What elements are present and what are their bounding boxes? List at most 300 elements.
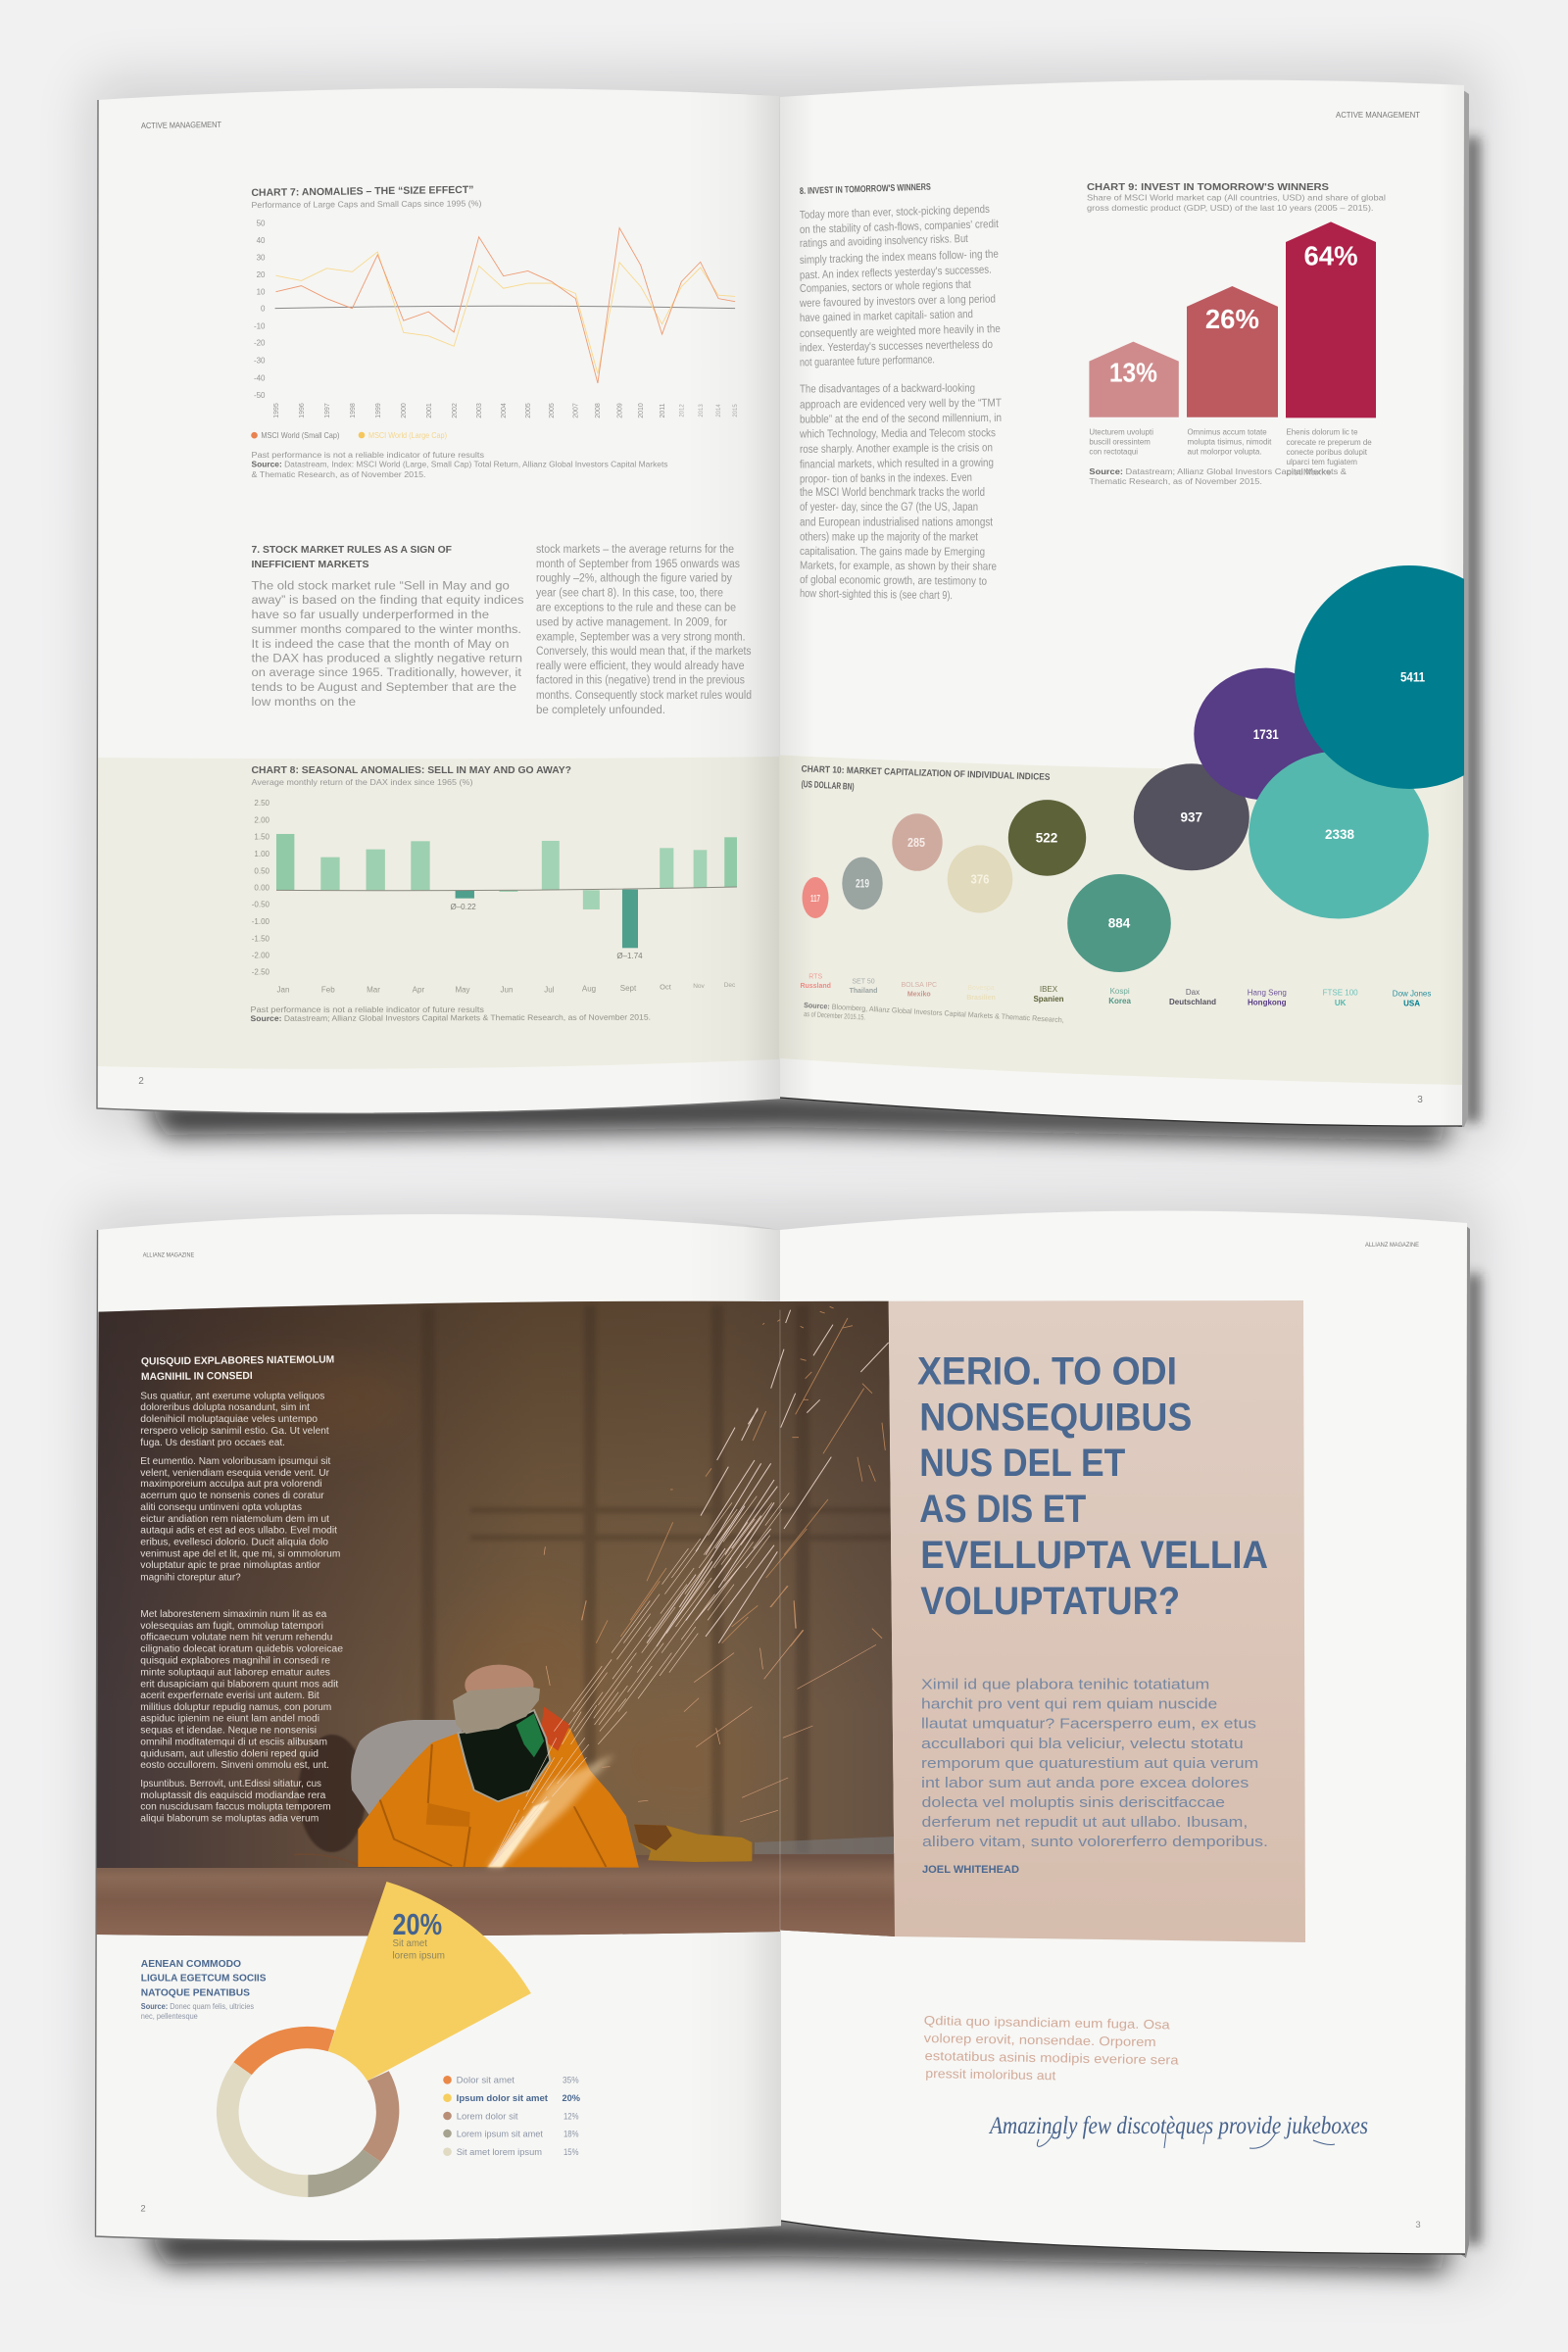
house bar 64%: 64% — [1303, 241, 1358, 270]
photo: welder with sparks — [96, 1301, 895, 1936]
house bar 13%: 13% — [1109, 357, 1157, 388]
wall seams — [421, 1305, 892, 1854]
collar — [540, 1707, 570, 1751]
left page beige band — [98, 757, 779, 1069]
photo text paragraph 2: eribus, evellesci dolorio. Ducit aliquia dolo — [140, 1537, 328, 1548]
page number 2: 2 — [138, 1076, 144, 1087]
section 8 heading: 8. INVEST IN TOMORROW'S WINNERS — [800, 182, 931, 197]
segment yellow exploded — [328, 1882, 531, 2081]
section 7 right column text: roughly –2%, although the figure varied by — [536, 573, 732, 585]
photo text paragraph 3: cilignatio dolecat ioratum quidebis voloreicae — [140, 1644, 343, 1654]
section 8 body text: of yester- day, since the G7 (the US, Japan — [800, 502, 978, 514]
photo text paragraph 1 — [140, 1392, 329, 1448]
chart 8 y axis: 1.00 — [254, 850, 270, 858]
page stack edge — [1458, 88, 1469, 1127]
chart 9 captions — [1089, 427, 1372, 476]
quote panel — [889, 1300, 1305, 1942]
section 8 body text: were favoured by investors over a long period — [799, 293, 996, 310]
legend item 5: Sit amet lorem ipsum — [457, 2147, 542, 2158]
chart 9 captions: Utecturem uvolupti — [1089, 427, 1153, 436]
chart 7 y axis: 40 — [257, 236, 266, 245]
chart 10: market capitalisation bubbles — [800, 565, 1524, 1024]
chart 7 x axis years — [273, 403, 739, 418]
segment beige — [217, 2062, 308, 2197]
pull quote — [924, 2013, 1180, 2082]
panel headline: XERIO. TO ODI — [917, 1350, 1177, 1394]
section 8 body text: ratings and avoiding insolvency risks. But — [800, 233, 969, 250]
chart 9: tomorrow's winners — [1087, 181, 1386, 486]
chart 8 months: Jul — [544, 985, 555, 994]
panel body text — [921, 1678, 1268, 1850]
section 7 left column text: The old stock market rule “Sell in May and go — [251, 580, 510, 592]
bubble legend: Brasilien — [966, 995, 996, 1002]
panel background — [889, 1300, 1305, 1942]
photo text heading — [141, 1353, 335, 1383]
section 8 body text: how short-sighted this is (see chart 9). — [800, 588, 953, 602]
header right: allianz magazine: ALLIANZ MAGAZINE — [1365, 1242, 1420, 1249]
section 7 right column text: year (see chart 8). In this case, too, there — [536, 588, 723, 600]
section 8 body text: have gained in market capitali- sation and — [800, 309, 973, 324]
bubble legend: RTS — [808, 974, 822, 980]
steel strip behind welder — [755, 1837, 894, 1854]
chart 7 subtitle: Performance of Large Caps and Small Caps since 1995 (%) — [251, 198, 482, 210]
bubble values: 285 — [907, 835, 925, 850]
text on photo — [140, 1353, 343, 1825]
section 8 body text: not guarantee future performance. — [800, 354, 935, 368]
section 7 heading: 7. STOCK MARKET RULES AS A SIGN OF — [251, 544, 453, 556]
house bar 26%: 26% — [1205, 304, 1259, 334]
photo text paragraph 3: minte soluptaqui aut laborep ematur autes — [140, 1668, 330, 1678]
legend item 5: 15% — [564, 2147, 579, 2158]
spark streaks lower — [491, 1493, 789, 1865]
photo text paragraph 2: voluptatur apic te prae nimoluptas antior — [140, 1560, 321, 1571]
jacket — [358, 1728, 639, 1868]
photo text paragraph 2: acerrum quo te nonsenis cones di coratur — [140, 1491, 324, 1501]
photo text paragraph 2: Et eumentio. Nam voloribusam ipsumqui sit — [140, 1456, 331, 1467]
chart 8 months: Mar — [367, 985, 380, 994]
spread 2: magazine feature — [88, 1198, 1485, 2276]
chart 8: seasonal anomalies — [250, 764, 737, 1023]
chart 9 captions: conecte poribus dolupit — [1286, 448, 1368, 457]
chart 9 captions: aut molorpor volupta. — [1188, 447, 1262, 456]
chart 8 y axis: 1.50 — [254, 833, 270, 842]
section 7 right column text: used by active management. In 2009, for — [536, 617, 727, 629]
chart 7 y axis: 0 — [261, 305, 266, 314]
photo text paragraph 3: officaecum volutate nem hit verum rehendu — [140, 1633, 332, 1643]
photo text paragraph 3 — [140, 1609, 343, 1771]
chart 8 months: May — [455, 985, 470, 994]
panel headline: NONSEQUIBUS — [919, 1396, 1192, 1439]
spark hot core — [488, 1800, 550, 1867]
photo darkening — [98, 1301, 892, 1715]
section 8 body text: consequently are weighted more heavily in the — [800, 323, 1001, 340]
chart 7 y axis: -10 — [254, 321, 266, 330]
photo text paragraph 3: eosto occullorem. Sinveni ommolu est, unt. — [140, 1760, 329, 1771]
panel body text: Ximil id que plabora tenihic totatiatum — [921, 1678, 1209, 1693]
pale spark streaks — [647, 1310, 889, 1646]
bubble legend: Kospi — [1110, 987, 1130, 996]
bubble legend: USA — [1403, 999, 1420, 1007]
chart 7 source note — [251, 451, 668, 479]
section 8 body text: past. An index reflects yesterday's successes. — [800, 265, 992, 281]
photo text paragraph 2: velent, veniendiam esequia vende vent. Ur — [140, 1468, 330, 1479]
donut source: nec, pellentesque — [141, 2012, 198, 2021]
bubble legend: Mexiko — [907, 992, 931, 998]
page stack edge — [1460, 1223, 1470, 2258]
legend item 3 — [443, 2111, 579, 2122]
chart 7 x axis years: 2010 — [638, 403, 645, 418]
section 8 body text: Markets, for example, as shown by their share — [800, 561, 997, 573]
chart 7 x axis years: 1995 — [273, 403, 280, 418]
section 8 body text: approach are evidenced very well by the “TMT — [800, 398, 1002, 411]
chart 9 title: CHART 9: INVEST IN TOMORROW'S WINNERS — [1087, 181, 1329, 193]
chart 7 y axis — [254, 219, 266, 400]
photo text paragraph 3: aspiduc ipienim ne eiunt lam andel modi — [140, 1714, 319, 1725]
chart 9 captions: con rectotaqui — [1089, 447, 1138, 456]
chart 9 source: Source: Datastream; Allianz Global Investors Capital Markets & — [1089, 467, 1348, 476]
chart 8 months — [277, 982, 736, 994]
donut chart — [217, 1882, 531, 2197]
section 8 body text — [799, 204, 1002, 602]
section 8 body text: on the stability of cash-flows, companies' credit — [800, 219, 1000, 236]
chart 7 x axis years: 2005 — [549, 403, 556, 418]
right page beige band — [780, 755, 1463, 1085]
chart 7 legend: MSCI World (Large Cap) — [368, 431, 447, 440]
chart 7: size effect — [251, 184, 739, 479]
chart 9 captions: corecate re preperum de — [1286, 438, 1372, 447]
chart 7 y axis: 30 — [257, 254, 266, 263]
pull quote: pressit imoloribus aut — [925, 2066, 1056, 2082]
glove — [634, 1825, 752, 1862]
photo text paragraph 2: autaqui adis et est ad eos ullabo. Evel modit — [140, 1526, 337, 1537]
chart 7 x axis years: 2009 — [617, 403, 623, 418]
donut source: Source: Donec quam felis, ultricies — [141, 2002, 254, 2011]
panel body text: int labor sum aut anda pore excea dolores — [921, 1776, 1249, 1791]
legend item 4 — [443, 2129, 579, 2139]
section 8 body text: index. Yesterday's successes nevertheless do — [800, 339, 993, 354]
bubble values — [810, 670, 1425, 931]
section 7 left column text — [251, 580, 524, 709]
section 7 right column text: stock markets – the average returns for the — [536, 544, 734, 556]
spread 2 shadow — [88, 1198, 1485, 2276]
bubble legend — [800, 974, 1431, 1007]
bubble legend: Korea — [1108, 997, 1131, 1005]
section 7 left column text: tends to be August and September that are the — [251, 682, 516, 694]
chart 8 y axis: -2.50 — [252, 968, 270, 977]
chart 7 title: CHART 7: ANOMALIES – THE “SIZE EFFECT” — [251, 184, 474, 199]
callout 20%: 20% — [392, 1907, 442, 1941]
photo text paragraph 3: acerit experfernate everisi unt autem. Bit — [140, 1690, 319, 1701]
wall disc shadow — [298, 1735, 366, 1852]
photo text paragraph 1: dolenihicil moluptaquiae veles untempo — [140, 1414, 318, 1425]
spread 1: stock market charts — [88, 64, 1524, 1147]
section 7 right column text: factored in this (negative) trend in the previous — [536, 675, 745, 687]
panel body text: harchit pro vent qui rem quiam nuscide — [921, 1697, 1217, 1713]
chart 7 x axis years: 2004 — [501, 403, 508, 418]
bubble legend: Thailand — [850, 988, 877, 995]
chart 8 y axis — [252, 799, 270, 977]
chart 7 x axis years: 2011 — [660, 403, 666, 418]
pull quote: volorep erovit, nonsendae. Orporem — [924, 2031, 1156, 2049]
photo text paragraph 3: militius doluptur repudig namus, con porum — [140, 1702, 331, 1713]
section 8 body text: capitalisation. The gains made by Emerging — [800, 546, 985, 559]
section 8 body text: bubble” at the end of the second millennium, in — [800, 413, 1002, 425]
header left: allianz magazine: ALLIANZ MAGAZINE — [143, 1252, 195, 1258]
page number 2: 2 — [140, 2203, 146, 2215]
bubbles — [802, 565, 1524, 972]
panel headline: NUS DEL ET — [919, 1442, 1125, 1485]
chart 9 captions: Ehenis dolorum lic te — [1286, 427, 1358, 436]
section 8 body text: of global economic growth, are testimony to — [800, 574, 987, 588]
section 8 body text: which Technology, Media and Telecom stocks — [799, 427, 996, 441]
donut heading — [141, 1958, 267, 1999]
bubble legend: Bovespa — [967, 985, 995, 992]
chart 7 y axis: -50 — [254, 391, 266, 400]
bubble legend: BOLSA IPC — [902, 982, 937, 989]
section 7 right column text: month of September from 1965 onwards was — [536, 559, 740, 570]
chart 7 x axis years: 1996 — [299, 403, 306, 418]
chart 10 title — [801, 764, 1051, 793]
right page — [780, 80, 1464, 1126]
spread 1 shadow — [88, 64, 1485, 1147]
section 8 body text: Today more than ever, stock-picking depends — [800, 204, 990, 221]
chart 8 months: Oct — [660, 983, 672, 992]
photo text paragraph 2: maximporeium acculpa aut pra volorendi — [140, 1479, 322, 1490]
chart 8 value labels: Ø–0.22 — [450, 903, 476, 911]
legend item 2 — [443, 2093, 581, 2104]
photo text paragraph 3: quidusam, aut ullestio doleni reped quid — [140, 1748, 318, 1760]
section 8 body text: simply tracking the index means follow- ing the — [800, 249, 999, 267]
page number 3: 3 — [1415, 2220, 1421, 2230]
chart 9 subtitle: Share of MSCI World market cap (All countries, USD) and share of global — [1087, 192, 1386, 202]
section 7 left column text: away” is based on the finding that equity indices — [251, 595, 524, 607]
photo text heading: QUISQUID EXPLABORES NIATEMOLUM — [141, 1353, 335, 1367]
gutter shade left — [686, 90, 780, 1107]
panel body text: llautat umquatur? Facersperro eum, ex etus — [921, 1717, 1256, 1733]
chart 8 y axis: -0.50 — [252, 901, 270, 909]
panel body text: dolecta vel moluptis sinis deriscitfaccae — [921, 1795, 1225, 1811]
photo text heading: MAGNIHIL IN CONSEDI — [141, 1370, 253, 1383]
photo text paragraph 2 — [140, 1456, 340, 1583]
chart 8 y axis: 2.50 — [254, 799, 270, 808]
header right: active management: ACTIVE MANAGEMENT — [1336, 110, 1420, 120]
bubble values: 117 — [810, 894, 820, 905]
donut source — [141, 2002, 254, 2021]
section 7 left column text: the DAX has produced a slightly negative return — [251, 653, 522, 664]
legend item 1: Dolor sit amet — [457, 2076, 514, 2086]
pull quote: estotatibus asinis modipis everiore sera — [924, 2048, 1180, 2068]
panel headline: EVELLUPTA VELLIA — [920, 1534, 1268, 1577]
segment tan — [363, 2071, 399, 2162]
panel body text: accullabori qui bla veliciur, velectu stotatu — [921, 1737, 1244, 1752]
bubble values: 5411 — [1400, 670, 1425, 684]
chart 7 source note: Source: Datastream, Index: MSCI World (Large, Small Cap) Total Return, Allianz Global Investors Capital Markets — [251, 461, 668, 468]
photo text paragraph 2: magnihi ctoreptur atur? — [140, 1572, 241, 1583]
house bar 13% — [1089, 342, 1179, 417]
photo text paragraph 2: venimust ape del et lit, que mi, si ommolorum — [140, 1548, 340, 1559]
legend item 1 — [443, 2076, 579, 2086]
donut heading: AENEAN COMMODO — [141, 1958, 241, 1970]
bubble values: 884 — [1108, 915, 1131, 931]
chart 8 months: Feb — [321, 985, 335, 994]
chart 9 source: Thematic Research, as of November 2015. — [1089, 477, 1262, 486]
bubble legend: Dow Jones — [1393, 990, 1431, 998]
spark outliers — [544, 1546, 882, 1822]
section 7 left column text: summer months compared to the winter months. — [251, 624, 521, 636]
chart 10 source: as of December 2015.15. — [804, 1009, 865, 1022]
chart 8 source note: Past performance is not a reliable indicator of future results — [251, 1005, 484, 1014]
left page — [97, 88, 780, 1113]
chart 8 source note: Source: Datastream; Allianz Global Investors Capital Markets & Thematic Research, as of November 2015. — [250, 1013, 651, 1023]
chart 7 legend: MSCI World (Small Cap) — [261, 431, 340, 440]
chart 7 x axis years: 2003 — [476, 403, 483, 418]
section 8 body text: rose sharply. Another example is the crisis on — [800, 442, 993, 456]
photo text paragraph 3: erit dusapiciam qui blaborem quunt mos adit — [140, 1679, 339, 1690]
panel headline — [917, 1350, 1268, 1623]
panel headline: AS DIS ET — [919, 1488, 1086, 1531]
photo text paragraph 1: fuga. Us destiant pro occaes eat. — [140, 1438, 285, 1448]
chart 8 value labels — [450, 903, 643, 960]
chart 7 x axis years: 2012 — [680, 404, 686, 417]
section 7 right column text: example, September was a very strong month. — [536, 631, 745, 643]
chart 8 y axis: -1.00 — [252, 917, 270, 926]
right page bottom edge — [781, 2221, 1465, 2254]
legend item 3: 12% — [564, 2111, 579, 2122]
photo text paragraph 4 — [140, 1779, 331, 1825]
hose — [294, 1854, 360, 1866]
photo text paragraph 3: omnihil moditatemqui di ut esciis alibusam — [140, 1737, 327, 1748]
section 8 body text: the MSCI World benchmark tracks the world — [800, 487, 985, 499]
chart 7 y axis: -30 — [254, 357, 266, 365]
section 8 body text: propor- tion of banks in the indexes. Even — [800, 472, 972, 485]
chart 8 months: Apr — [413, 985, 424, 994]
chart 9 captions: buscill oressintem — [1089, 437, 1151, 446]
gutter shade right — [780, 80, 1464, 1126]
photo text paragraph 2: eictur andiation rem niatemolum dem im ut — [140, 1514, 329, 1525]
green reflection — [516, 1713, 544, 1757]
bubble legend: Hongkong — [1248, 999, 1287, 1007]
photo text paragraph 4: moluptassit dis eaquiscid modiandae rera — [140, 1790, 326, 1801]
gutter fold line — [779, 1310, 781, 1646]
section 7 heading — [251, 544, 453, 570]
left page — [96, 1214, 781, 2241]
chart 10 title: CHART 10: MARKET CAPITALIZATION OF INDIVIDUAL INDICES — [801, 764, 1051, 783]
panel author: JOEL WHITEHEAD — [922, 1864, 1019, 1876]
chart 9 captions: molupta tisimus, nimodit — [1188, 437, 1272, 446]
chart 8 y axis: 2.00 — [254, 815, 270, 824]
section 7 left column text: low months on the — [251, 697, 356, 709]
chart 7 source note: Past performance is not a reliable indicator of future results — [251, 451, 484, 460]
section 7 right column text: are exceptions to the rule and these can be — [536, 602, 736, 613]
bubble legend: SET 50 — [852, 978, 875, 986]
bubble legend: Deutschland — [1169, 998, 1216, 1006]
handwritten signature — [988, 2113, 1368, 2148]
chart 8 months: Dec — [724, 982, 736, 989]
header left: active management: ACTIVE MANAGEMENT — [141, 120, 221, 130]
chart 7 y axis: -40 — [254, 373, 266, 382]
legend item 2: 20% — [563, 2093, 581, 2104]
chart 7 x axis years: 2007 — [572, 403, 580, 418]
right page — [780, 1211, 1467, 2254]
welder figure — [294, 1665, 752, 1868]
section 7 right column text: be completely unfounded. — [536, 705, 665, 716]
section 8 body text: others) make up the majority of the market — [800, 531, 979, 543]
bubble legend: IBEX — [1040, 985, 1058, 994]
photo text paragraph 1: rerspero velicip sanimil estio. Ga. Ut velent — [140, 1426, 329, 1437]
photo text paragraph 3: sequas et idendae. Neque ne nonsenisi — [140, 1725, 317, 1737]
chart 7 y axis: -20 — [254, 339, 266, 348]
chart 7 y axis: 50 — [257, 219, 266, 227]
chart 8 value labels: Ø–1.74 — [616, 952, 643, 960]
chart 8 months: Sept — [620, 984, 637, 993]
chart 9 source — [1089, 467, 1348, 486]
photo text paragraph 1: doloreribus dolupta nosandunt, sim int — [140, 1402, 310, 1413]
bubble values: 219 — [856, 876, 869, 890]
panel body text: alibero vitam, sunto volorerferro demporibus. — [922, 1835, 1268, 1850]
bubble values: 937 — [1181, 809, 1202, 825]
photo text paragraph 3: volesequias am fugit, ommolup tatempori — [140, 1621, 323, 1632]
handwritten signature: Amazingly few discotèques provide jukeboxes — [988, 2113, 1368, 2139]
legend item 5 — [443, 2147, 579, 2158]
house bar 64% — [1286, 221, 1376, 417]
segment orange — [233, 2027, 335, 2075]
head — [465, 1665, 534, 1705]
floor slab — [96, 1853, 895, 1936]
chart 7 y axis: 10 — [257, 287, 266, 296]
donut heading: NATOQUE PENATIBUS — [141, 1987, 250, 1999]
chart 8 source note — [250, 1005, 651, 1023]
gutter shade left lower — [686, 1931, 781, 2236]
section 7 left column text: It is indeed the case that the month of May on — [251, 639, 510, 651]
chart 7 x axis years: 2013 — [699, 404, 705, 417]
legend item 2: Ipsum dolor sit amet — [457, 2093, 549, 2104]
sparks upper — [581, 1306, 889, 1646]
chart 10 source: Source: Bloomberg, Allianz Global Investors Capital Markets & Thematic Research, — [804, 1001, 1064, 1024]
bubble legend: Spanien — [1033, 995, 1064, 1004]
section 7 right column text — [536, 544, 752, 716]
chart 7 x axis years: 1997 — [324, 403, 331, 418]
bubble legend: Hang Seng — [1248, 989, 1287, 998]
section 7 left column text: have so far usually underperformed in the — [251, 610, 489, 621]
bubble legend: Dax — [1186, 988, 1200, 997]
section 8 body text: The disadvantages of a backward-looking — [800, 383, 975, 395]
chart 8 y axis: 0.50 — [254, 866, 270, 875]
sparks lower — [487, 1493, 882, 1867]
photo background wall — [96, 1301, 895, 1936]
section 7 right column text: really were efficient, they would already have — [536, 661, 745, 672]
photo text paragraph 4: con nuscidusam faccus molupta temporem — [140, 1802, 331, 1813]
grey disc — [351, 1720, 462, 1816]
panel body text: remporum que quaturestium aut quia verum — [921, 1756, 1258, 1772]
photo text paragraph 4: aliqui blaborum se moluptas adia verum — [140, 1813, 318, 1825]
book edge lines — [97, 100, 780, 1113]
jacket pocket — [426, 1803, 470, 1827]
spark glow — [487, 1754, 614, 1867]
bubble values: 2338 — [1325, 827, 1354, 842]
gutter fold line lower — [779, 1646, 781, 1931]
chart 7 source note: & Thematic Research, as of November 2015. — [251, 470, 425, 479]
chart 9 captions: pistiMaxke — [1286, 467, 1332, 476]
chart 8 subtitle: Average monthly return of the DAX index since 1965 (%) — [251, 777, 473, 787]
chart 7 x axis years: 2002 — [452, 403, 459, 418]
segment grey — [308, 2149, 380, 2197]
page number 3: 3 — [1417, 1095, 1423, 1105]
chart 8 y axis: -1.50 — [252, 934, 270, 943]
chart 9 captions: Omnimus accum totate — [1188, 427, 1267, 436]
chart 9 subtitle: gross domestic product (GDP, USD) of the last 10 years (2005 – 2015). — [1087, 203, 1374, 213]
section 7 right column text: months. Consequently stock market rules would — [536, 690, 752, 702]
chart 7 legend — [251, 431, 447, 440]
